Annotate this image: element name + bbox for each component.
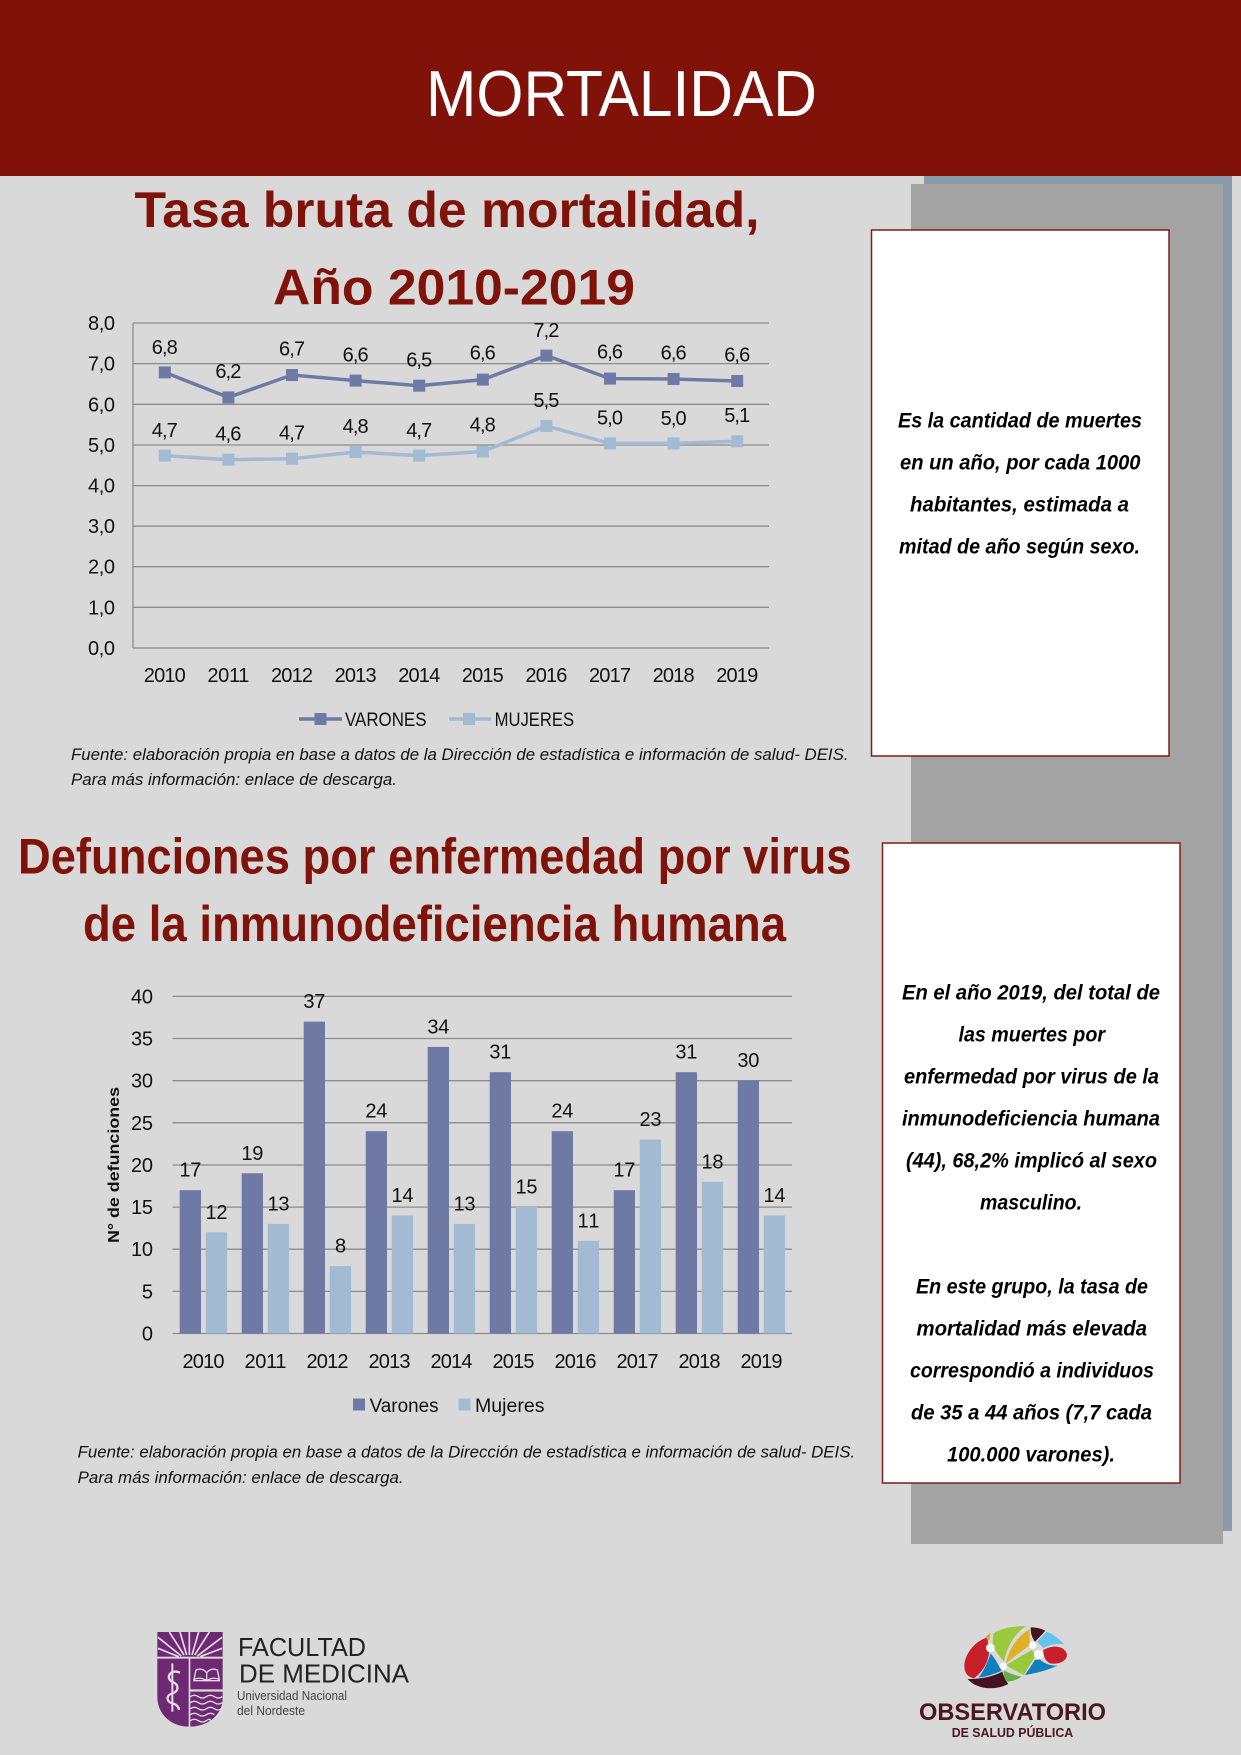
series: mujeres — [152, 390, 750, 466]
y axis labels: 6,0 — [88, 394, 115, 416]
series: varones: 6,6 — [661, 343, 687, 365]
source note: line chart — [71, 745, 848, 789]
bar chart: defunciones — [106, 986, 792, 1417]
bars: varones: 24 — [551, 1101, 573, 1123]
x axis labels: 2019 — [740, 1351, 782, 1373]
text box: VIH datos 2019: 100.000 varones). — [947, 1444, 1115, 1467]
y axis labels: 30 — [131, 1071, 153, 1093]
text box: definición — [872, 230, 1169, 756]
bars: varones: 31 — [675, 1042, 697, 1064]
heading: tasa bruta de mortalidad: Tasa bruta de mortalidad, — [134, 182, 760, 238]
text box: definición: mitad de año según sexo. — [899, 536, 1140, 558]
legend: Varones — [370, 1396, 439, 1417]
y axis labels: 5 — [142, 1281, 153, 1303]
series: varones: 6,6 — [470, 343, 496, 365]
y axis labels: 35 — [131, 1028, 153, 1050]
y axis labels: 15 — [131, 1197, 153, 1219]
text box: VIH datos 2019: mortalidad más elevada — [916, 1318, 1147, 1341]
text box: VIH datos 2019 — [882, 843, 1180, 1483]
y axis labels: 20 — [131, 1155, 153, 1177]
series: mujeres: 4,7 — [279, 423, 305, 445]
x axis labels: 2010 — [182, 1351, 224, 1373]
logo: Observatorio de Salud Pública — [919, 1626, 1106, 1740]
legend: Mujeres — [475, 1396, 544, 1417]
legend: MUJERES — [495, 710, 574, 731]
source note: line chart: Fuente: elaboración propia en base a datos de la Dirección de estadística e información de salud- DEIS. — [71, 745, 848, 764]
text box: VIH datos 2019: correspondió a individuos — [910, 1360, 1154, 1383]
y axis labels — [131, 986, 153, 1346]
bars: mujeres: 14 — [392, 1185, 414, 1207]
series: mujeres: 5,1 — [724, 405, 750, 427]
series: varones: 7,2 — [533, 320, 559, 342]
series: varones: 6,6 — [597, 342, 623, 364]
heading: defunciones VIH: de la inmunodeficiencia humana — [83, 896, 787, 952]
heading: tasa bruta de mortalidad: Año 2010-2019 — [273, 260, 635, 316]
series: mujeres: 5,5 — [533, 390, 559, 412]
x axis labels: 2018 — [678, 1351, 720, 1373]
x axis labels: 2013 — [368, 1351, 410, 1373]
x axis labels: 2011 — [244, 1351, 286, 1373]
bars: mujeres: 12 — [206, 1202, 228, 1224]
bars: mujeres: 13 — [454, 1193, 476, 1215]
x axis labels: 2016 — [554, 1351, 596, 1373]
icon: colourful brain — [964, 1626, 1067, 1688]
y axis labels: 0 — [142, 1324, 153, 1346]
x axis labels: 2015 — [462, 665, 504, 687]
series: mujeres: 5,0 — [661, 408, 687, 430]
bars: varones — [179, 991, 759, 1334]
x axis labels: 2017 — [589, 665, 631, 687]
bars: mujeres: 15 — [516, 1176, 538, 1198]
logo text: Universidad Nacional — [237, 1689, 347, 1703]
legend: VARONES — [345, 710, 426, 731]
bars: mujeres: 14 — [764, 1185, 786, 1207]
legend — [299, 710, 574, 731]
y axis labels: 40 — [131, 986, 153, 1008]
text box: definición: habitantes, estimada a — [910, 494, 1129, 516]
bars: mujeres — [206, 1109, 786, 1334]
text box: VIH datos 2019: de 35 a 44 años (7,7 cada — [911, 1402, 1152, 1425]
bars: mujeres: 23 — [640, 1109, 662, 1131]
series: varones: 6,2 — [215, 361, 241, 383]
line chart: tasa bruta de mortalidad — [88, 313, 769, 731]
x axis labels: 2012 — [271, 665, 313, 687]
source note: bar chart: Fuente: elaboración propia en base a datos de la Dirección de estadística e información de salud- DEIS. — [78, 1442, 855, 1462]
x axis labels: 2017 — [616, 1351, 658, 1373]
text box: VIH datos 2019: masculino. — [980, 1192, 1082, 1215]
series: varones: 6,8 — [152, 337, 178, 359]
y axis labels: 7,0 — [88, 354, 115, 376]
x axis labels: 2018 — [653, 665, 695, 687]
heading: tasa bruta de mortalidad — [134, 182, 760, 316]
logo text — [237, 1632, 410, 1718]
logo text: del Nordeste — [237, 1704, 305, 1718]
bars: varones: 17 — [179, 1160, 201, 1182]
text box: definición: Es la cantidad de muertes — [898, 410, 1142, 432]
text box: VIH datos 2019: las muertes por — [958, 1024, 1107, 1046]
bars: varones: 34 — [427, 1016, 449, 1038]
series: mujeres: 4,7 — [406, 420, 432, 442]
text box: VIH datos 2019: enfermedad por virus de la — [904, 1066, 1159, 1089]
series: mujeres: 4,8 — [470, 414, 496, 436]
y axis labels: 4,0 — [88, 476, 115, 498]
bars: mujeres: 18 — [702, 1151, 724, 1173]
icon: shield — [157, 1632, 223, 1727]
x axis labels: 2010 — [144, 665, 186, 687]
x axis labels: 2016 — [525, 665, 567, 687]
bars: varones: 30 — [737, 1050, 759, 1072]
series: mujeres: 5,0 — [597, 407, 623, 429]
series: varones: 6,5 — [406, 350, 432, 372]
bars: mujeres: 13 — [268, 1193, 290, 1215]
logo text: DE MEDICINA — [239, 1659, 410, 1689]
y axis labels: 8,0 — [88, 313, 115, 335]
x axis labels: 2013 — [335, 665, 377, 687]
y axis labels — [88, 313, 115, 660]
y axis labels: 0,0 — [88, 638, 115, 660]
heading: defunciones VIH: Defunciones por enfermedad por virus — [18, 828, 852, 884]
source note: bar chart — [78, 1442, 855, 1487]
x axis labels: 2014 — [430, 1351, 472, 1373]
y axis labels: 10 — [131, 1239, 153, 1261]
title: MORTALIDAD — [426, 57, 817, 130]
series: mujeres: 4,6 — [215, 424, 241, 446]
series: varones: 6,6 — [724, 345, 750, 367]
bars: mujeres: 11 — [578, 1210, 600, 1232]
y axis labels: 1,0 — [88, 597, 115, 619]
series: mujeres: 4,8 — [343, 416, 369, 438]
x axis labels — [144, 665, 758, 687]
source note: bar chart: Para más información: enlace de descarga. — [78, 1468, 404, 1487]
logo text: OBSERVATORIO — [919, 1699, 1106, 1726]
x axis labels: 2014 — [398, 665, 440, 687]
text box: VIH datos 2019: (44), 68,2% implicó al sexo — [906, 1150, 1157, 1173]
y axis title: N° de defunciones — [106, 1087, 123, 1243]
x axis labels: 2019 — [716, 665, 758, 687]
series: varones — [152, 320, 750, 403]
y axis labels: 2,0 — [88, 557, 115, 579]
logo text — [919, 1699, 1106, 1740]
x axis labels: 2011 — [207, 665, 249, 687]
bars: varones: 37 — [303, 991, 325, 1013]
series: varones: 6,6 — [343, 345, 369, 367]
header banner — [0, 0, 1241, 176]
series: mujeres: 4,7 — [152, 420, 178, 442]
bars: varones: 19 — [241, 1143, 263, 1165]
side panel: gray column — [911, 184, 1223, 1544]
series: varones: 6,7 — [279, 338, 305, 360]
source note: line chart: Para más información: enlace de descarga. — [71, 770, 397, 789]
x axis labels — [182, 1351, 782, 1373]
y axis labels: 25 — [131, 1113, 153, 1135]
logo: Facultad de Medicina — [157, 1632, 410, 1727]
legend — [353, 1396, 544, 1417]
bars: mujeres: 8 — [335, 1236, 346, 1258]
logo text: DE SALUD PÚBLICA — [952, 1725, 1074, 1740]
bars: varones: 31 — [489, 1042, 511, 1064]
text box: VIH datos 2019: En este grupo, la tasa de — [916, 1276, 1148, 1299]
text box: definición: en un año, por cada 1000 — [900, 452, 1141, 474]
text box: VIH datos 2019: En el año 2019, del total de — [902, 982, 1160, 1004]
bars: varones: 24 — [365, 1101, 387, 1123]
text box: VIH datos 2019: inmunodeficiencia humana — [902, 1108, 1160, 1131]
y axis labels: 5,0 — [88, 435, 115, 457]
bars: varones: 17 — [613, 1160, 635, 1182]
logo text: FACULTAD — [238, 1632, 366, 1662]
x axis labels: 2015 — [492, 1351, 534, 1373]
side panel: blue-gray backing — [924, 170, 1232, 1531]
y axis labels: 3,0 — [88, 516, 115, 538]
x axis labels: 2012 — [306, 1351, 348, 1373]
heading: defunciones VIH — [18, 828, 852, 952]
